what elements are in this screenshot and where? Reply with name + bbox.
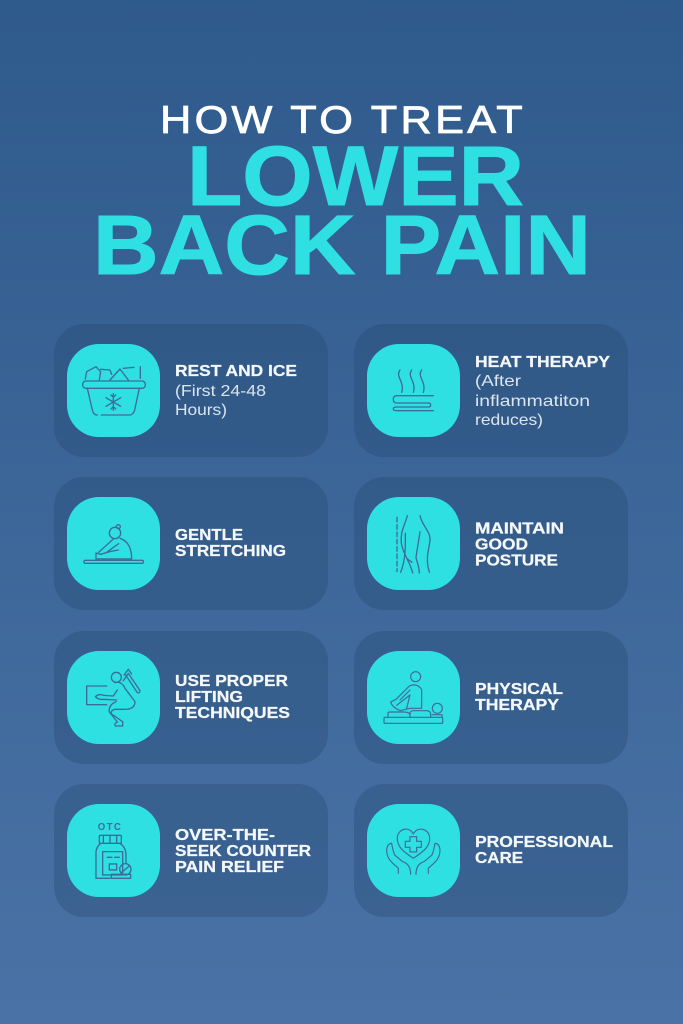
text: lifting: TECHNIQUES [175,705,290,722]
text: heat therapy: reduces) [475,412,543,429]
icon: hands holding heart [387,829,440,874]
text: professional care [475,834,613,867]
icon: ice basket [83,367,145,415]
text: lifting [175,673,290,722]
text: heat therapy: HEAT THERAPY [475,354,610,371]
text: heat therapy: inflammatiton [475,393,590,410]
panel: over-the-counter pain relief [54,784,328,917]
text: heat therapy: (After [475,373,522,390]
text: gentle stretching: STRETCHING [175,543,286,560]
text: gentle stretching [175,527,286,560]
panel: use proper lifting techniques [54,631,328,764]
panel: heat therapy [354,324,628,457]
text: gentle stretching: GENTLE [175,527,243,544]
icon: otc medicine bottle [96,822,131,878]
text: maintain good posture [475,520,564,570]
text: physical therapy [475,681,563,714]
icon: seated stretch [84,525,143,563]
text: maintain good posture: GOOD [475,536,528,554]
text: professional care: PROFESSIONAL [475,834,613,851]
icon: back posture [397,516,430,573]
icon label: otc: OTC [98,822,122,833]
title line: how to treat: HOW TO TREAT [160,99,526,142]
title line: back pain: BACK PAIN [93,198,591,292]
panel: physical therapy [354,631,628,764]
text: lifting: USE PROPER [175,673,288,690]
text: rest and ice: Hours) [175,402,227,419]
text: maintain good posture: POSTURE [475,552,558,570]
icon: heat pad [393,370,433,411]
text: rest and ice [175,363,297,419]
text: heat therapy [475,354,610,429]
icon: massage therapist [384,672,443,723]
text: otc relief: SEEK COUNTER [175,843,311,860]
panel: gentle stretching [54,477,328,610]
text: rest and ice: (First 24-48 [175,383,266,400]
text: otc relief: OVER-THE- [175,827,275,844]
text: maintain good posture: MAINTAIN [475,520,564,538]
text: otc relief: PAIN RELIEF [175,859,284,876]
panel: professional care [354,784,628,917]
title line: lower: LOWER [187,129,524,223]
text: physical therapy: PHYSICAL [475,681,563,698]
text: rest and ice: REST AND ICE [175,363,297,380]
panel: maintain good posture [354,477,628,610]
text: otc relief [175,827,311,876]
title [93,99,591,292]
icon: squat lift [87,669,140,726]
text: physical therapy: THERAPY [475,697,559,714]
text: lifting: LIFTING [175,689,243,706]
text: professional care: CARE [475,850,523,867]
panel: rest and ice [54,324,328,457]
